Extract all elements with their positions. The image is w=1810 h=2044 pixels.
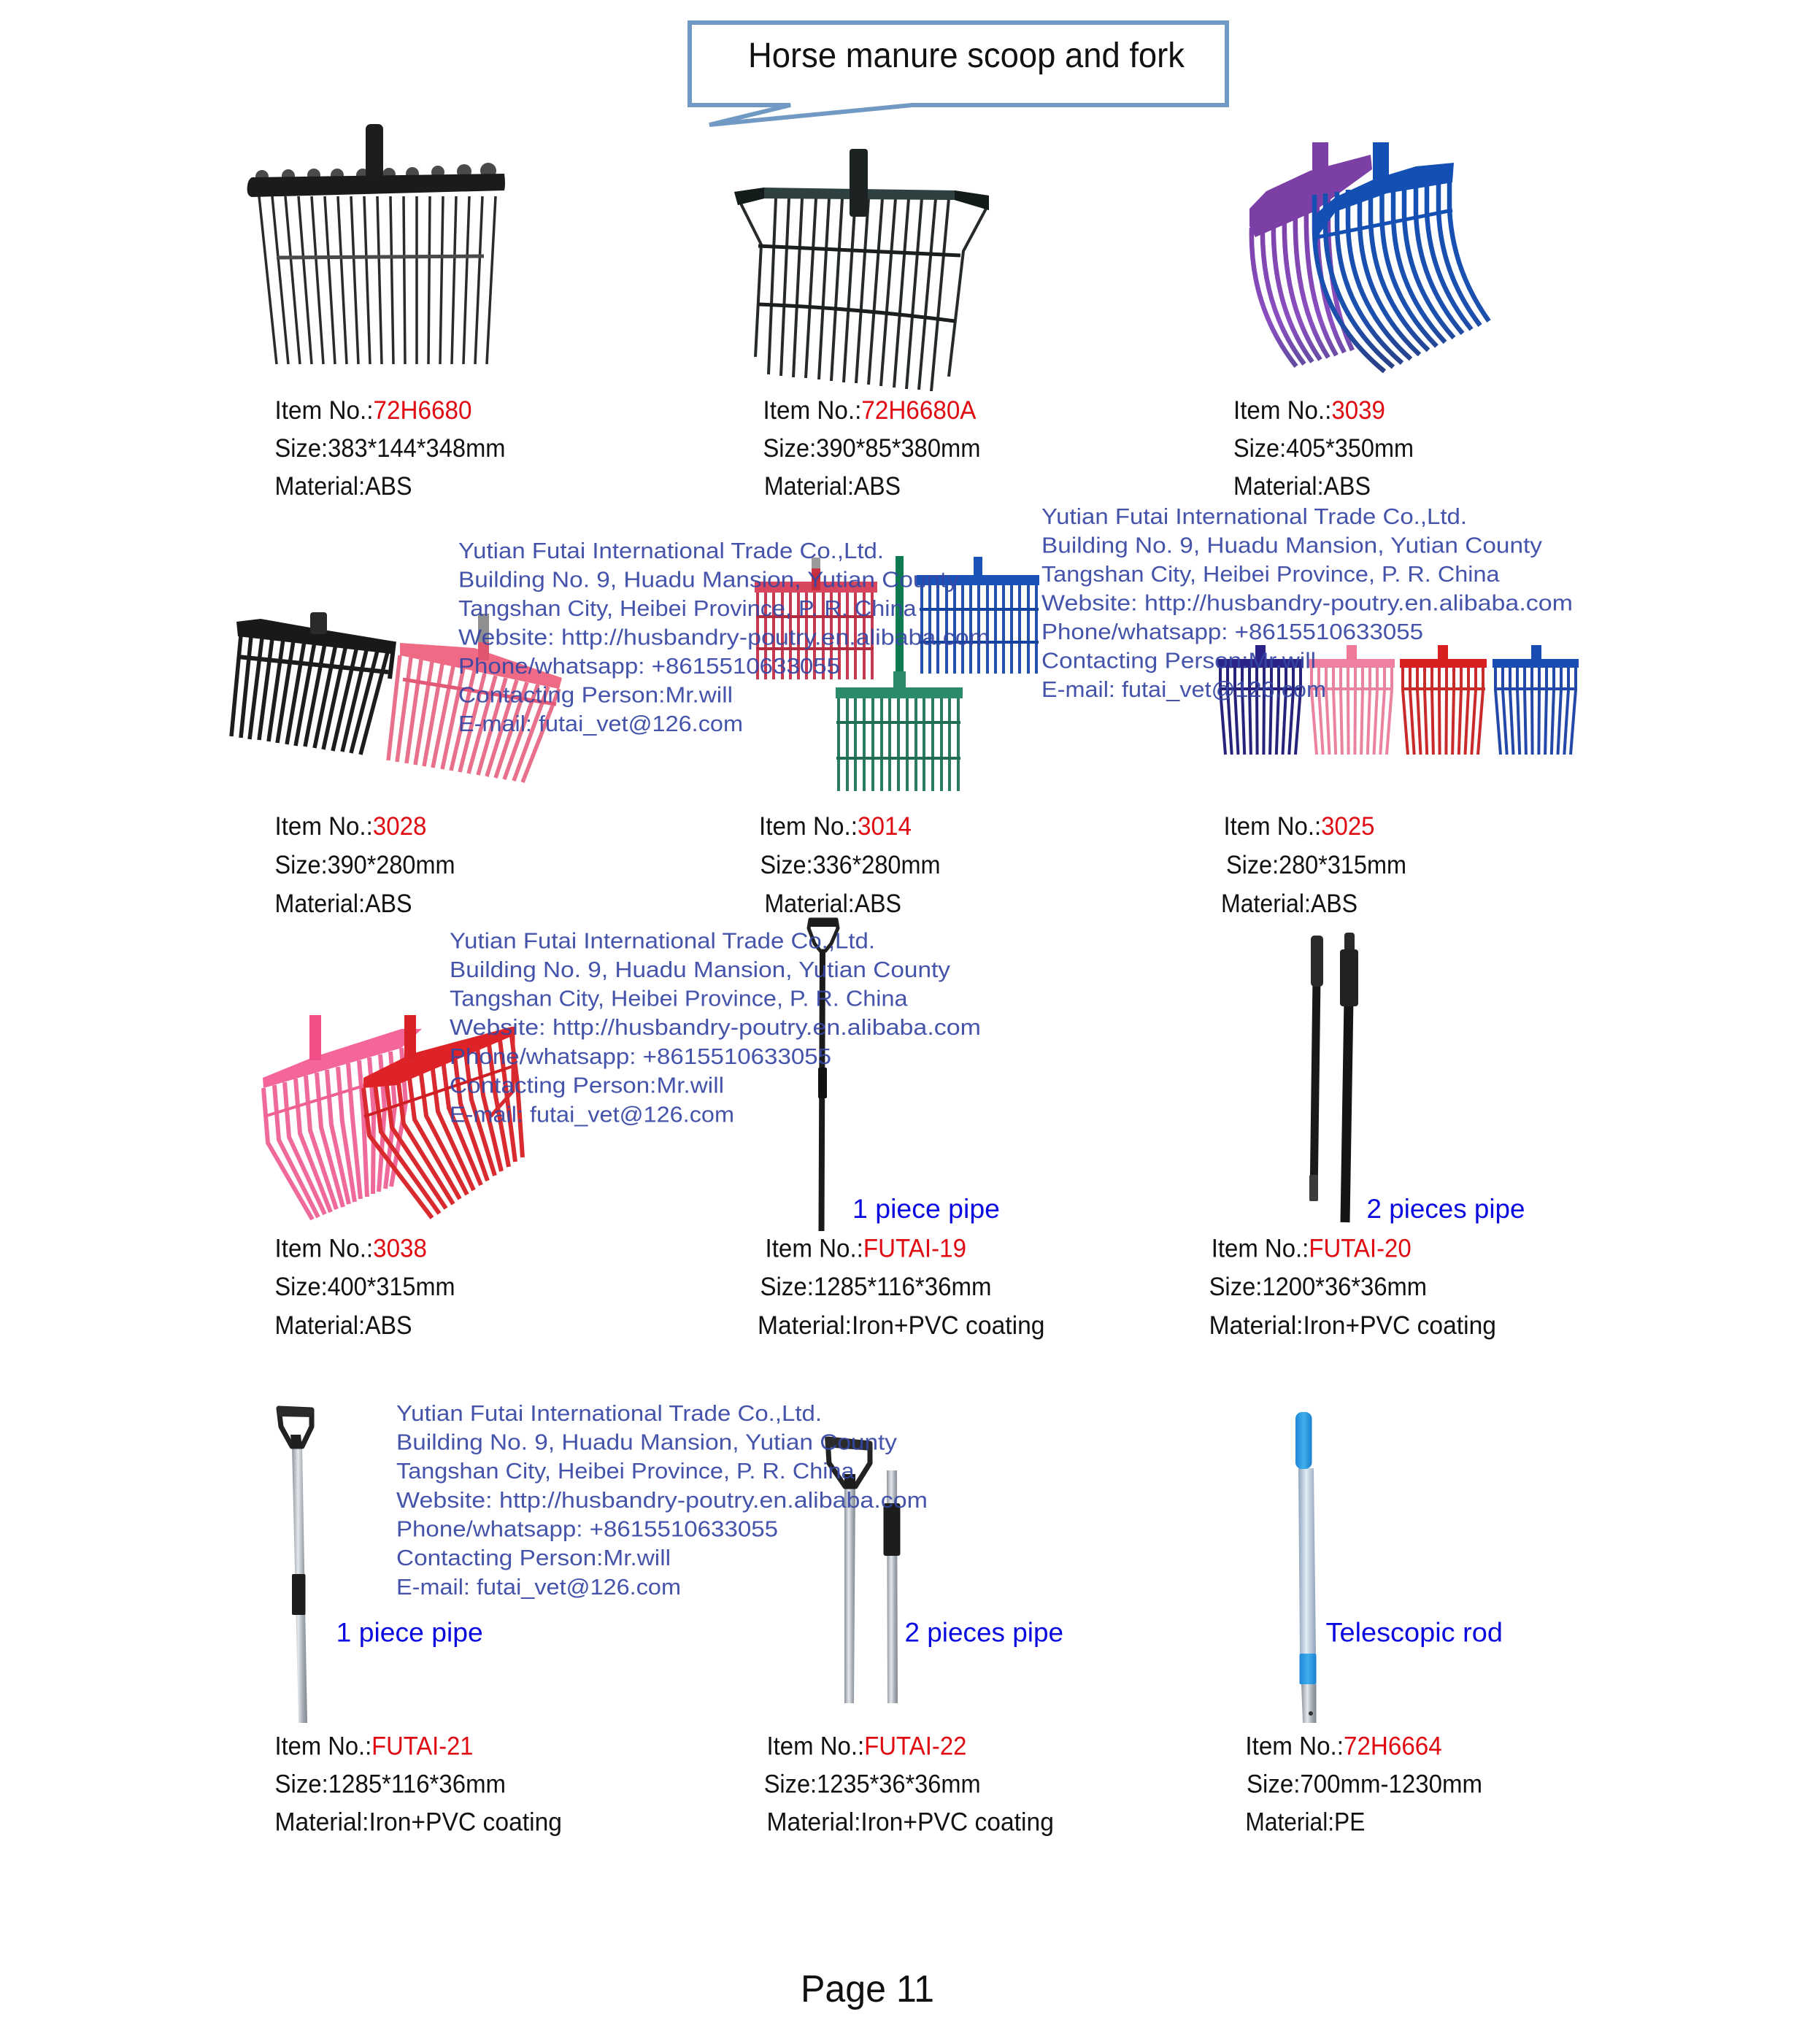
navy fork [1217, 645, 1303, 755]
contact block row 3: E-mail: futai_vet@126.com [450, 1102, 734, 1127]
material 72H6680: Material:ABS [274, 472, 412, 501]
fork 72H6680A [734, 149, 989, 391]
pink fork [1309, 645, 1395, 755]
contact block row 4: Tangshan City, Heibei Province, P. R. China [396, 1458, 855, 1484]
contact block row 3: Contacting Person:Mr.will [450, 1073, 724, 1098]
size FUTAI-19: Size:1285*116*36mm [760, 1273, 991, 1301]
contact block row 2 right: Tangshan City, Heibei Province, P. R. China [1041, 561, 1500, 587]
contact block row 3: Website: http://husbandry-poutry.en.alibaba.com [450, 1014, 981, 1040]
material 3038: Material:ABS [274, 1311, 412, 1340]
item text 72H6680A: Item No.:72H6680A [763, 396, 977, 425]
label telescopic rod: Telescopic rod [1325, 1617, 1503, 1648]
material 3025: Material:ABS [1221, 890, 1358, 918]
contact block row 2 right: Yutian Futai International Trade Co.,Ltd. [1041, 504, 1467, 529]
item text 3028: Item No.:3028 [274, 812, 426, 841]
title: Horse manure scoop and fork [748, 36, 1185, 75]
contact block row 4: Yutian Futai International Trade Co.,Ltd. [396, 1400, 822, 1426]
material FUTAI-19: Material:Iron+PVC coating [758, 1311, 1045, 1340]
contact block row 4: Contacting Person:Mr.will [396, 1545, 671, 1570]
size 72H6680A: Size:390*85*380mm [763, 434, 981, 463]
fork 72H6680 [247, 124, 505, 364]
contact block row 4 [396, 1400, 928, 1600]
item text FUTAI-20: Item No.:FUTAI-20 [1212, 1235, 1412, 1262]
size FUTAI-20: Size:1200*36*36mm [1209, 1273, 1427, 1301]
contact block row 2 left: Yutian Futai International Trade Co.,Ltd. [458, 538, 884, 563]
size FUTAI-21: Size:1285*116*36mm [274, 1770, 506, 1798]
contact block row 2 left: Contacting Person:Mr.will [458, 682, 733, 708]
contact block row 2 left [458, 538, 990, 736]
item text 3038: Item No.:3038 [274, 1235, 427, 1262]
item text 72H6664: Item No.:72H6664 [1245, 1732, 1442, 1760]
contact block row 2 right: Contacting Person:Mr.will [1041, 648, 1316, 673]
size 3038: Size:400*315mm [274, 1273, 455, 1301]
label 1 piece pipe: 1 piece pipe [336, 1617, 483, 1648]
contact block row 2 left: Tangshan City, Heibei Province, P. R. China [458, 595, 917, 621]
contact block row 3: Yutian Futai International Trade Co.,Ltd. [450, 928, 875, 953]
contact block row 2 left: E-mail: futai_vet@126.com [458, 711, 743, 736]
contact block row 2 right: Website: http://husbandry-poutry.en.alibaba.com [1041, 590, 1573, 616]
item text 3039: Item No.:3039 [1233, 396, 1385, 425]
size 3039: Size:405*350mm [1233, 434, 1414, 463]
red fork [1400, 645, 1487, 755]
size 3028: Size:390*280mm [274, 851, 455, 879]
contact block row 2 left: Building No. 9, Huadu Mansion, Yutian County [458, 566, 960, 593]
material FUTAI-22: Material:Iron+PVC coating [766, 1808, 1054, 1836]
contact block row 4: E-mail: futai_vet@126.com [396, 1574, 681, 1600]
contact block row 2 left: Website: http://husbandry-poutry.en.alibaba.com [458, 625, 990, 649]
material 3028: Material:ABS [274, 890, 412, 918]
item text 3014: Item No.:3014 [759, 812, 912, 841]
contact block row 3: Phone/whatsapp: +8615510633055 [450, 1044, 831, 1069]
pipe FUTAI-20 [1309, 933, 1358, 1222]
pipe FUTAI-19 [809, 919, 838, 1231]
material 72H6664: Material:PE [1245, 1808, 1365, 1836]
item text FUTAI-22: Item No.:FUTAI-22 [766, 1732, 966, 1760]
pipe FUTAI-22 [825, 1437, 901, 1703]
material 3014: Material:ABS [765, 890, 901, 918]
fork 3028 black and pink [231, 612, 562, 782]
contact block row 4: Building No. 9, Huadu Mansion, Yutian County [396, 1429, 898, 1455]
contact block row 2 right: Building No. 9, Huadu Mansion, Yutian County [1041, 533, 1543, 558]
item text 72H6680: Item No.:72H6680 [274, 396, 471, 425]
telescopic rod 72H6664 [1295, 1412, 1317, 1723]
size 3014: Size:336*280mm [760, 851, 940, 879]
material 3039: Material:ABS [1233, 472, 1371, 501]
label 2 pieces pipe: 2 pieces pipe [905, 1617, 1063, 1648]
contact block row 4: Phone/whatsapp: +8615510633055 [396, 1516, 778, 1541]
fork 3039 purple and blue [1249, 142, 1489, 371]
contact block row 2 left: Phone/whatsapp: +8615510633055 [458, 653, 840, 679]
contact block row 3: Building No. 9, Huadu Mansion, Yutian County [450, 957, 951, 982]
page number: Page 11 [801, 1968, 934, 2010]
item text FUTAI-19: Item No.:FUTAI-19 [765, 1235, 966, 1262]
contact block row 4: Website: http://husbandry-poutry.en.alibaba.com [396, 1487, 928, 1513]
label 2 pieces pipe: 2 pieces pipe [1366, 1194, 1525, 1224]
title callout [690, 23, 1227, 125]
contact block row 3: Tangshan City, Heibei Province, P. R. China [450, 985, 908, 1011]
contact block row 2 right: E-mail: futai_vet@126.com [1041, 676, 1326, 702]
material FUTAI-21: Material:Iron+PVC coating [274, 1808, 562, 1836]
size 3025: Size:280*315mm [1226, 851, 1406, 879]
item text 3025: Item No.:3025 [1223, 812, 1375, 841]
size 72H6680: Size:383*144*348mm [274, 434, 505, 463]
blue fork [1493, 645, 1579, 755]
pipe FUTAI-21 [277, 1406, 313, 1723]
fork 3014 red, blue, green [755, 556, 1039, 791]
material FUTAI-20: Material:Iron+PVC coating [1209, 1311, 1496, 1340]
material 72H6680A: Material:ABS [764, 472, 901, 501]
fork 3025 four colours [1217, 645, 1579, 755]
contact block row 2 right [1041, 504, 1573, 702]
label 1 piece pipe: 1 piece pipe [852, 1194, 1000, 1224]
item text FUTAI-21: Item No.:FUTAI-21 [274, 1732, 473, 1760]
contact block row 3 [450, 928, 981, 1127]
size 72H6664: Size:700mm-1230mm [1247, 1770, 1482, 1798]
contact block row 2 right: Phone/whatsapp: +8615510633055 [1041, 619, 1423, 644]
fork 3038 pink and red [263, 1015, 523, 1219]
size FUTAI-22: Size:1235*36*36mm [764, 1770, 981, 1798]
